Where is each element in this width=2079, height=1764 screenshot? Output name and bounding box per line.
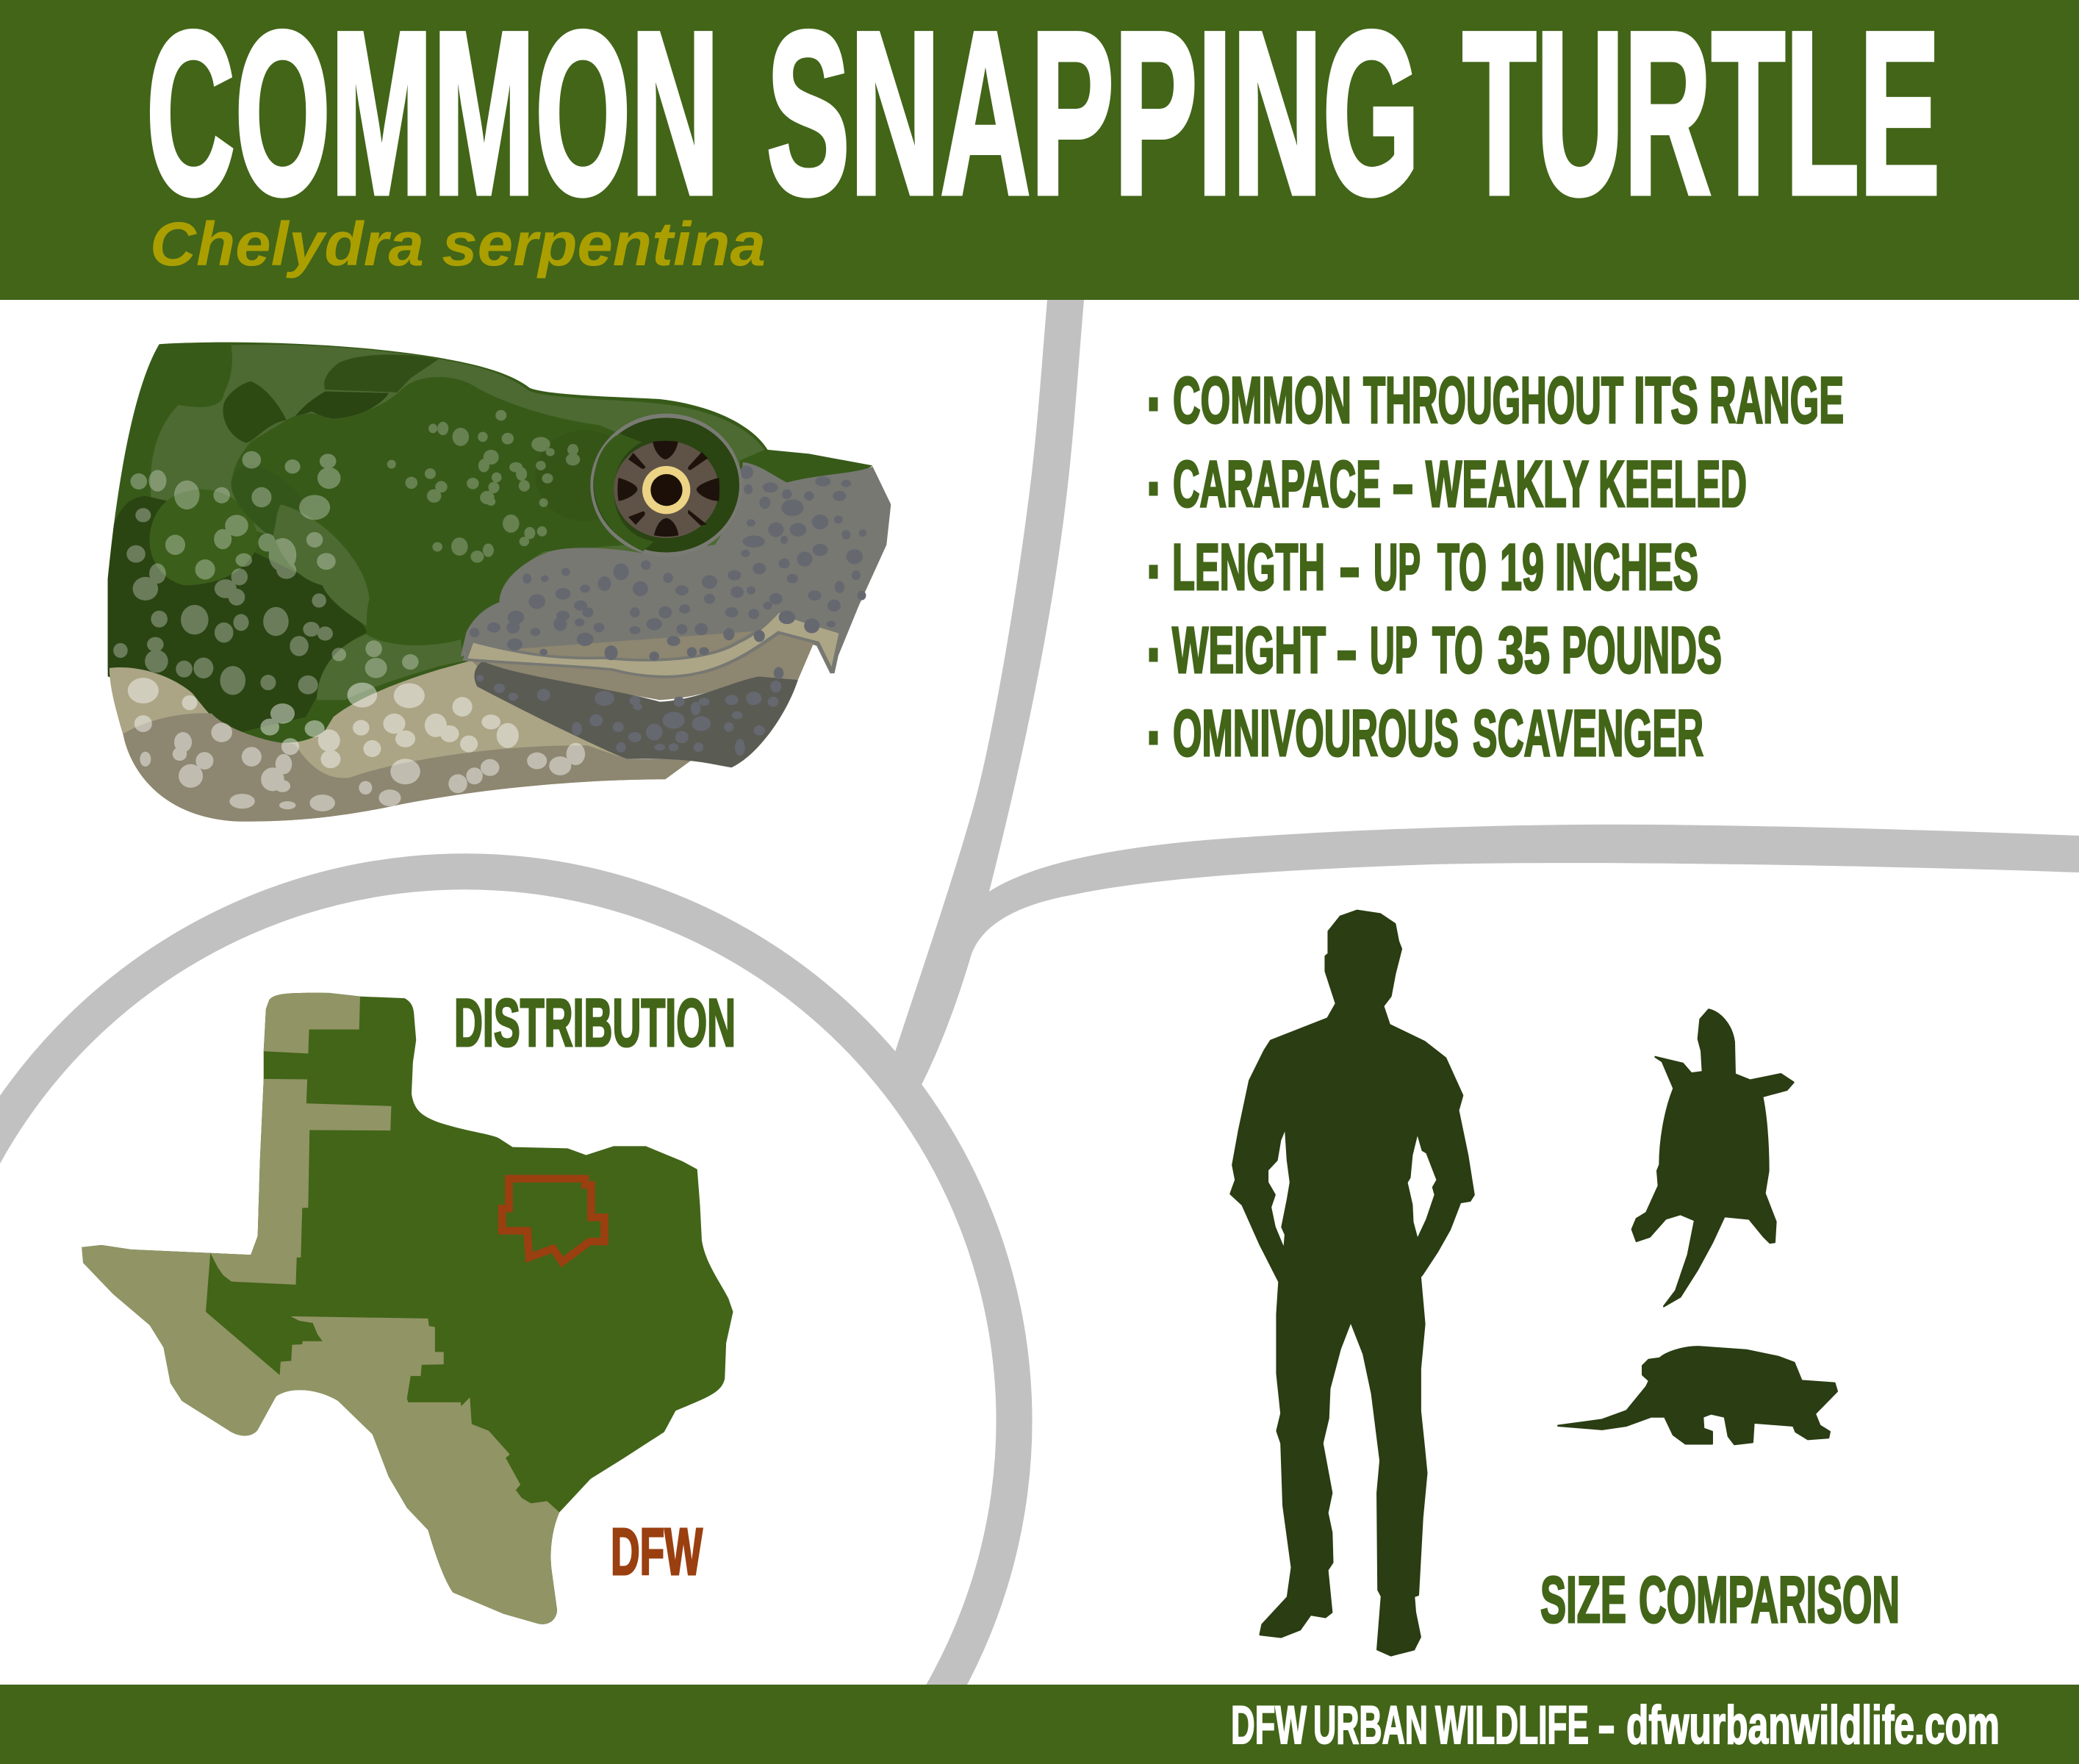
fact: common: THROUGHOUT	[1363, 363, 1623, 437]
lower jaw	[474, 662, 798, 767]
fact: weight: WEIGHT	[1172, 613, 1326, 686]
fact: weight: UP	[1370, 613, 1418, 686]
footer band	[0, 1685, 2079, 1764]
fact: carapace: -	[1392, 447, 1414, 520]
fact: weight	[1150, 613, 1722, 686]
fact: length: 19	[1500, 530, 1544, 603]
DFW outline on map	[502, 1179, 604, 1262]
silhouette: human	[1230, 911, 1474, 1655]
fact: length: LENGTH	[1172, 530, 1325, 603]
fact: weight: -	[1336, 613, 1357, 686]
scale spots: dark on snout	[470, 465, 866, 756]
head base silhouette	[108, 343, 873, 747]
heading: distribution: DISTRIBUTION	[454, 986, 736, 1061]
title	[146, 0, 1940, 243]
illustration: snapping turtle head	[108, 343, 891, 822]
scale spots: pale on neck	[128, 678, 585, 811]
fact: weight: 35	[1498, 613, 1550, 686]
silhouette: turtle from side	[1558, 1347, 1837, 1444]
silhouette: turtle from above	[1632, 1009, 1794, 1306]
upper lip	[465, 611, 841, 677]
fact: diet: OMNIVOUROUS	[1173, 696, 1459, 770]
fact: common: COMMON	[1173, 363, 1351, 437]
fact: carapace	[1150, 447, 1747, 520]
panel: size comparison	[1230, 911, 1900, 1655]
footer credit: DFW	[1231, 1696, 1307, 1755]
fact: length: TO	[1437, 530, 1487, 603]
neck: pale underside	[109, 659, 693, 822]
subtitle: scientific name: Chelydra serpentina	[150, 209, 766, 279]
footer credit: URBAN	[1313, 1696, 1428, 1755]
map: Texas range	[82, 993, 733, 1624]
fact: weight: TO	[1432, 613, 1483, 686]
panel: distribution map	[82, 986, 736, 1624]
heading: size comparison	[1540, 1563, 1900, 1636]
scale spots: pale on green	[387, 410, 580, 563]
fact: length: UP	[1374, 530, 1421, 603]
fact: carapace: KEELED	[1598, 447, 1747, 520]
label: DFW: DFW	[611, 1516, 703, 1589]
panel: header band	[0, 0, 2079, 300]
heading: size comparison: COMPARISON	[1639, 1563, 1900, 1636]
fact: carapace: CARAPACE	[1173, 447, 1381, 520]
fact: length: -	[1339, 530, 1360, 603]
lower beak	[464, 629, 814, 700]
fact: common: ITS	[1634, 363, 1698, 437]
fact: length: INCHES	[1555, 530, 1698, 603]
fact: length	[1150, 530, 1698, 603]
panel dividers: curved grey bands	[0, 300, 2079, 1707]
heading: size comparison: SIZE	[1540, 1563, 1626, 1636]
fact: carapace: WEAKLY	[1426, 447, 1589, 520]
fact: diet: SCAVENGER	[1473, 696, 1703, 770]
snout	[461, 462, 891, 673]
footer credit	[1231, 1696, 2000, 1755]
fact: weight: POUNDS	[1562, 613, 1722, 686]
panel: key facts list	[1150, 363, 1844, 770]
fact: common	[1150, 363, 1844, 437]
icon: eye	[590, 414, 742, 556]
fact: common: RANGE	[1709, 363, 1844, 437]
footer credit: -	[1598, 1696, 1615, 1755]
footer credit: WILDLIFE	[1435, 1696, 1589, 1755]
